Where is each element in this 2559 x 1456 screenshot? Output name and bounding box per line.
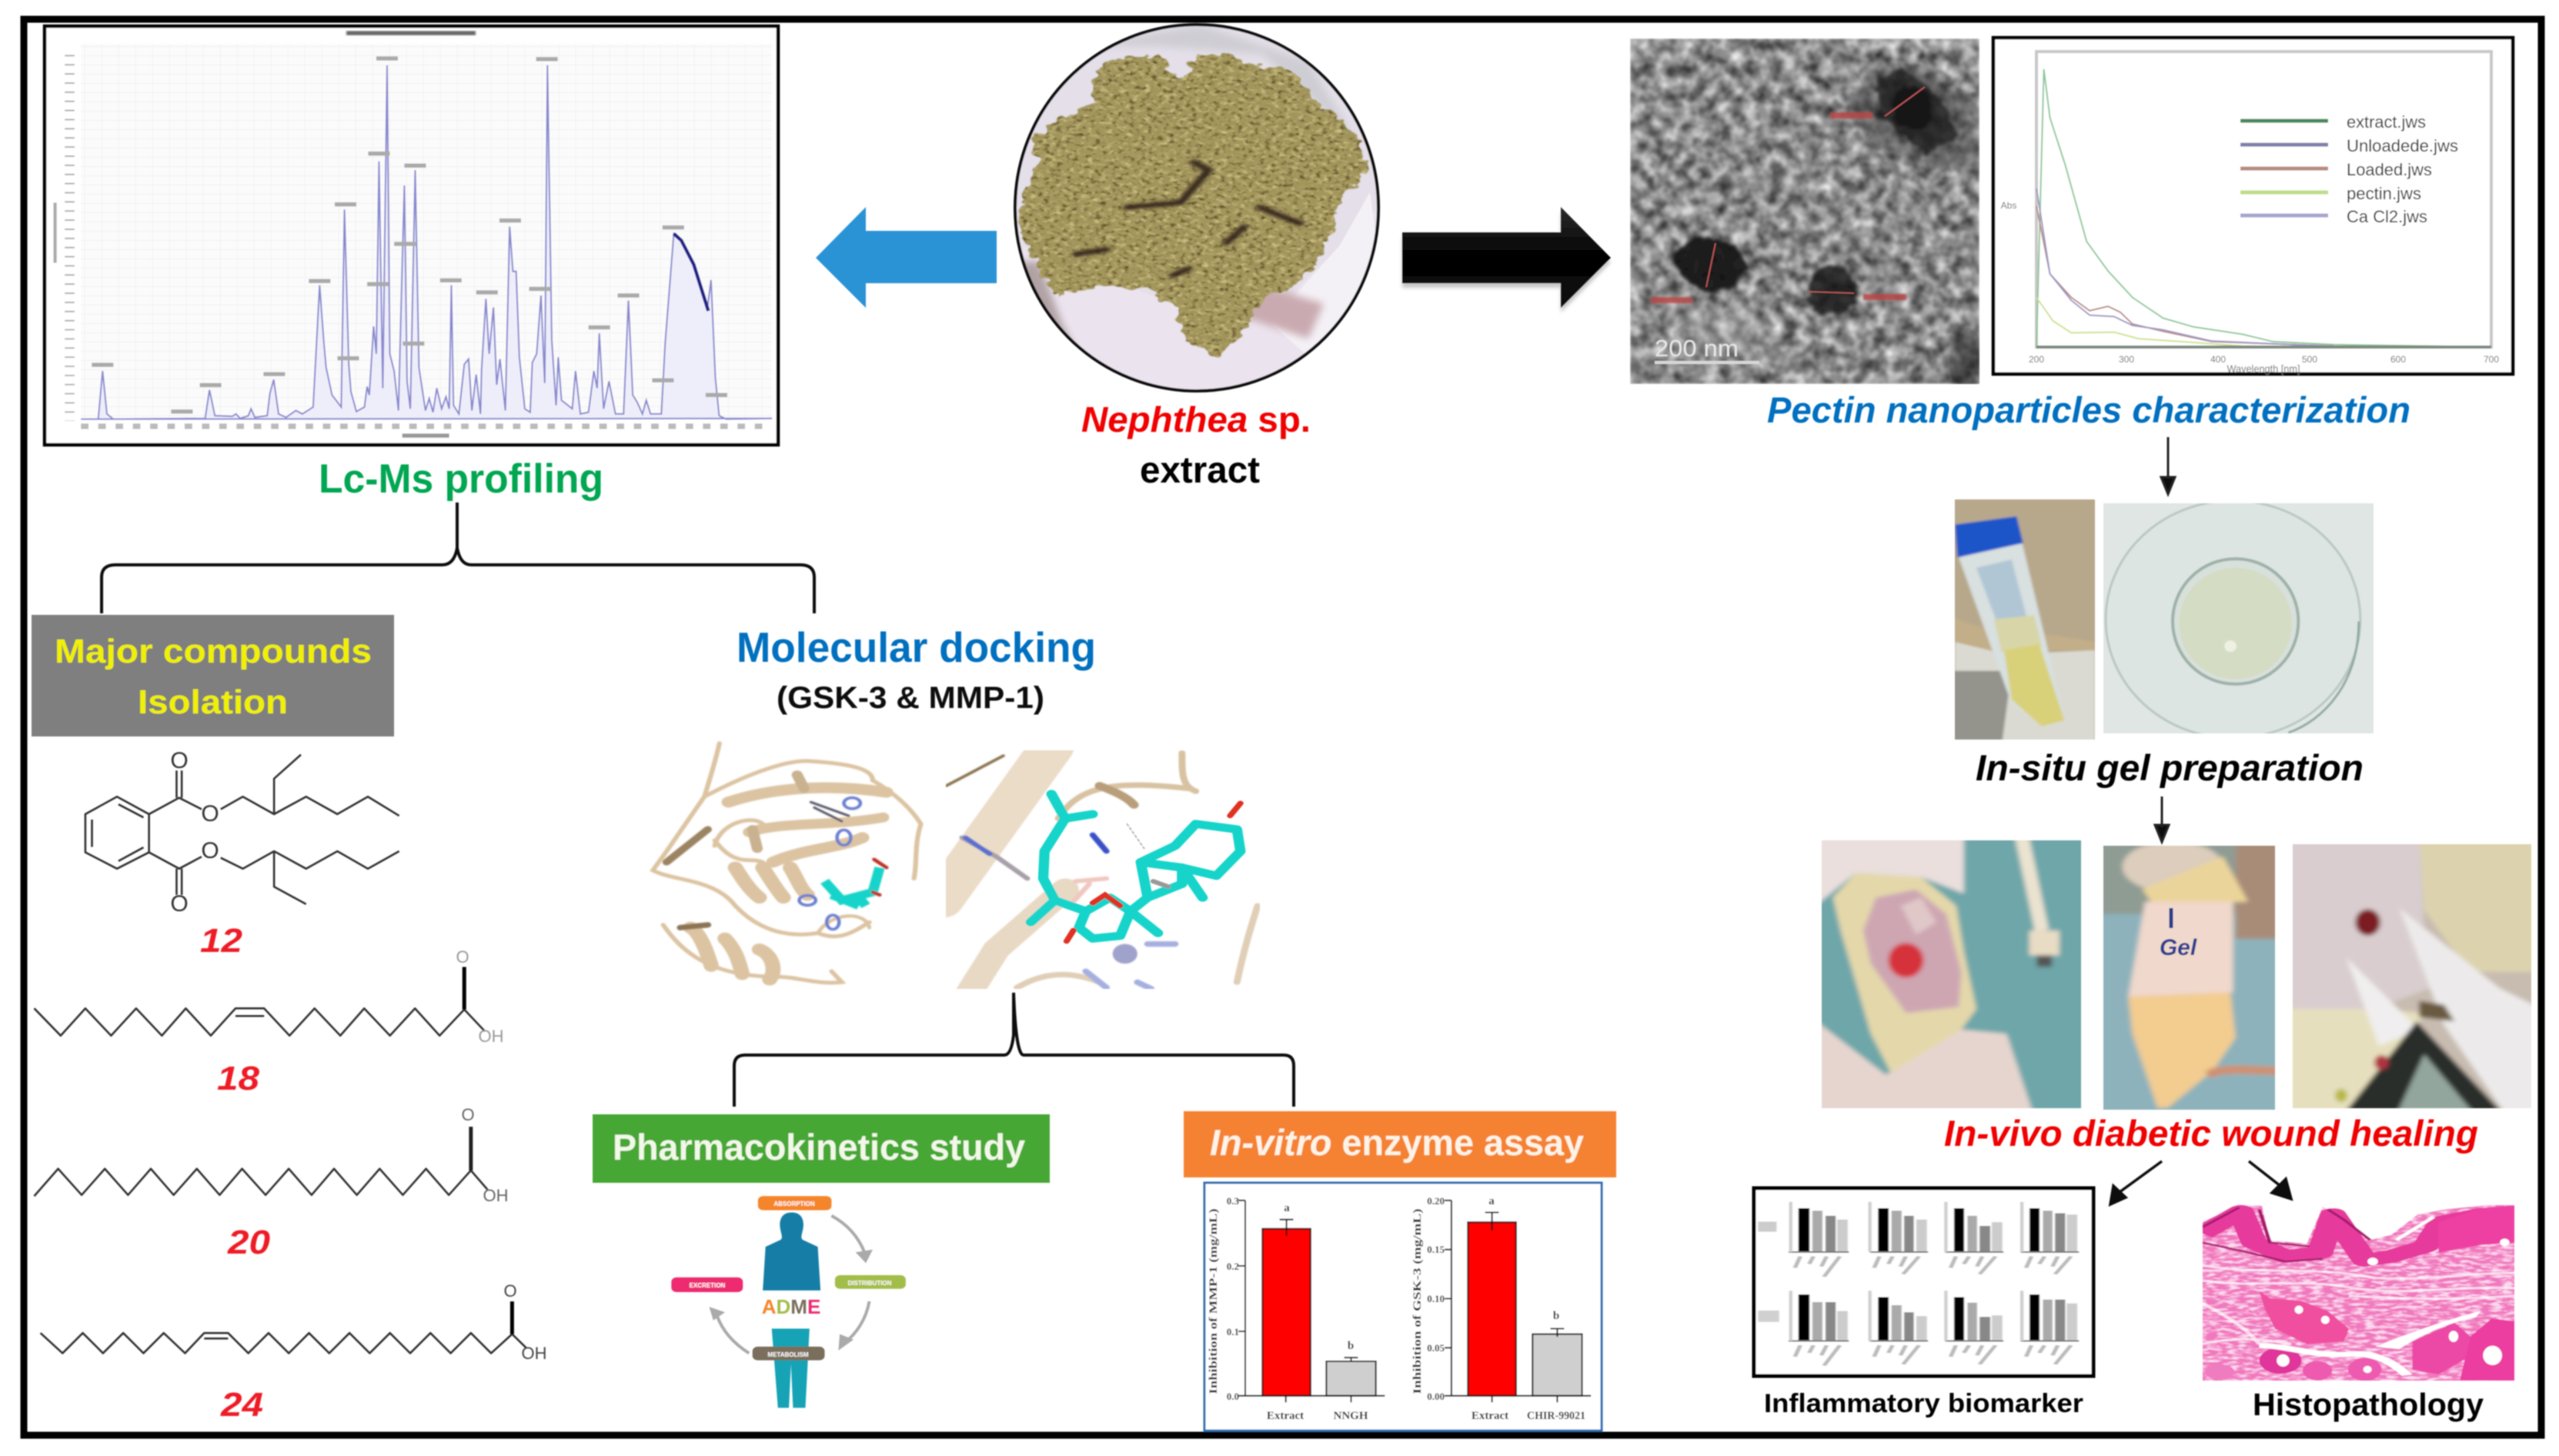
panel: enzyme assay bar charts: CHIR-99021 (1527, 1410, 1585, 1422)
photo: falcon tube (1954, 499, 2096, 740)
icon: human legs (772, 1329, 810, 1408)
structure: compound 18: OH (479, 1027, 503, 1046)
heading: Lc-Ms profiling: Lc-Ms profiling (319, 456, 603, 502)
image: histopathology section (2201, 1204, 2515, 1381)
image: protein ribbon overview (653, 743, 920, 983)
photo: caliper measurement (2292, 843, 2532, 1110)
structure: compound 18 (34, 947, 504, 1046)
panel: enzyme assay bar charts: 0.0 (1227, 1391, 1239, 1402)
arrow: black right arrow (1402, 207, 1611, 312)
structure: compound 20 (34, 1105, 509, 1205)
structure: compound 24 (41, 1281, 546, 1363)
panel: UV spectra: extract.jws (2347, 112, 2426, 132)
panel: UV spectra: 500 (2302, 354, 2317, 365)
label: compound 20: 20 (227, 1224, 271, 1261)
panel: UV spectra: Loaded.jws (2347, 160, 2432, 179)
image: ligand binding site (945, 750, 1261, 990)
panel: enzyme assay bar charts: 0.00 (1427, 1391, 1445, 1402)
arrow: to inflammatory biomarker (2110, 1161, 2162, 1204)
arrow: blue left arrow (816, 207, 997, 308)
heading: Pectin nanoparticles characterization: Pectin nanoparticles characterization (1767, 389, 2410, 430)
panel: enzyme assay bar charts: 0.20 (1427, 1195, 1445, 1207)
arrow: gel to in-vivo (2155, 796, 2169, 842)
arrow: characterization to gel (2161, 437, 2175, 494)
dermal fibres (2203, 1265, 2514, 1344)
panel: enzyme assay bar charts: 0.3 (1227, 1195, 1239, 1207)
structure: compound 12: O (201, 838, 219, 863)
label: Inflammatory biomarker: Inflammatory biomarker (1764, 1389, 2083, 1418)
dark aggregates (1674, 65, 1983, 396)
panel: enzyme assay bar charts (1204, 1183, 1602, 1431)
label: extract: extract (1140, 450, 1260, 491)
panel: enzyme assay bar charts: 0.2 (1227, 1261, 1239, 1272)
photo: rat wound (1821, 840, 2082, 1109)
panel: UV spectra: 300 (2119, 354, 2134, 365)
structure: compound 20: O (461, 1105, 475, 1124)
label: compound 12: 12 (200, 922, 243, 960)
row 2 bars (1789, 1291, 2079, 1341)
diagram: ADME: EXCRETION (690, 1282, 726, 1289)
panel: UV spectra: Ca Cl2.jws (2347, 207, 2427, 226)
panel: UV spectra (1993, 38, 2513, 375)
box: Major compounds Isolation: Major compounds (55, 633, 372, 670)
structure: compound 12: O (201, 801, 219, 827)
bracket: Lc-Ms branches (102, 503, 814, 613)
panel: enzyme assay bar charts: Inhibition of MMP-1 (mg/mL) (1208, 1208, 1220, 1394)
heading: In-situ gel preparation: In-situ gel preparation (1976, 747, 2364, 788)
panel: UV spectra: 600 (2390, 354, 2406, 365)
bracket: docking branches (734, 993, 1294, 1107)
photo: rat with gel label (2103, 845, 2276, 1110)
box: In-vitro enzyme assay (1184, 1111, 1616, 1177)
label: Gel marker on rat: Gel (2160, 935, 2197, 960)
image: TEM micrograph (1630, 38, 1983, 396)
label: compound 24: 24 (220, 1386, 263, 1424)
mark: group line on rat (2169, 908, 2173, 928)
panel: enzyme assay bar charts: Inhibition of GSK-3 (mg/mL) (1411, 1209, 1424, 1394)
diagram: ADME: DISTRIBUTION (848, 1280, 892, 1287)
panel: enzyme assay bar charts: a (1488, 1195, 1495, 1207)
panel: enzyme assay bar charts: b (1348, 1340, 1354, 1352)
box: Pharmacokinetics study: Pharmacokinetics study (613, 1127, 1025, 1167)
panel: inflammatory biomarker charts (1754, 1188, 2093, 1376)
bars: MMP-1 (1238, 1201, 1385, 1402)
structure: compound 24: O (503, 1281, 517, 1301)
box: Major compounds Isolation (32, 615, 394, 736)
structure: compound 20: OH (483, 1186, 508, 1205)
panel: enzyme assay bar charts: 0.1 (1227, 1326, 1239, 1337)
glands (2260, 1291, 2349, 1344)
photo: Nephthea coral (1001, 19, 1385, 400)
arrow: to histopathology (2249, 1161, 2291, 1199)
label: Histopathology: Histopathology (2253, 1387, 2484, 1422)
structure: compound 12 (85, 748, 399, 917)
structure: compound 12: O (170, 891, 189, 917)
box: Major compounds Isolation: Isolation (138, 683, 288, 721)
panel: UV spectra: Wavelength [nm] (2227, 362, 2300, 375)
panel: LC-MS chromatogram (45, 26, 778, 445)
panel: enzyme assay bar charts: Extract (1267, 1410, 1304, 1422)
box: Pharmacokinetics study (593, 1114, 1050, 1183)
panel: UV spectra: Unloadede.jws (2347, 136, 2458, 155)
bars: GSK-3 (1445, 1201, 1591, 1402)
heading: In-vivo diabetic wound healing: In-vivo diabetic wound healing (1944, 1113, 2478, 1154)
diagram: ADME: ADME (762, 1295, 820, 1318)
panel: UV spectra: Abs (2001, 200, 2016, 211)
panel: enzyme assay bar charts: 0.10 (1427, 1293, 1445, 1304)
panel: UV spectra: 400 (2210, 354, 2226, 365)
row 1 bars (1789, 1202, 2079, 1252)
subheading: targets: (GSK-3 & MMP-1) (777, 681, 1044, 715)
panel: UV spectra: 700 (2484, 354, 2499, 365)
panel: enzyme assay bar charts: b (1553, 1310, 1559, 1322)
structure: compound 24: OH (522, 1344, 546, 1363)
heading: Molecular docking: Molecular docking (737, 623, 1096, 671)
panel: enzyme assay bar charts: 0.15 (1427, 1244, 1445, 1255)
diagram: ADME (671, 1196, 906, 1408)
chromatogram trace (81, 65, 772, 419)
photo: petri dish (2103, 503, 2374, 734)
image: TEM micrograph: 200 nm (1655, 335, 1739, 362)
icon: human upper body (763, 1212, 820, 1291)
diagram: ADME: METABOLISM (767, 1351, 809, 1358)
structure: compound 18: O (456, 947, 469, 967)
panel: enzyme assay bar charts: a (1284, 1202, 1290, 1214)
box: In-vitro enzyme assay: In-vitro enzyme assay (1210, 1122, 1584, 1163)
panel: enzyme assay bar charts: NNGH (1333, 1410, 1368, 1422)
diagram: ADME: ABSORPTION (773, 1201, 815, 1207)
panel: UV spectra: pectin.jws (2347, 184, 2421, 203)
panel: enzyme assay bar charts: Extract (1472, 1410, 1508, 1422)
structure: compound 12: O (170, 748, 189, 773)
label: compound 18: 18 (217, 1060, 260, 1097)
panel: UV spectra: 200 (2029, 354, 2044, 365)
panel: enzyme assay bar charts: 0.05 (1427, 1342, 1445, 1354)
label: Nephthea sp.: Nephthea sp. (1081, 399, 1311, 439)
